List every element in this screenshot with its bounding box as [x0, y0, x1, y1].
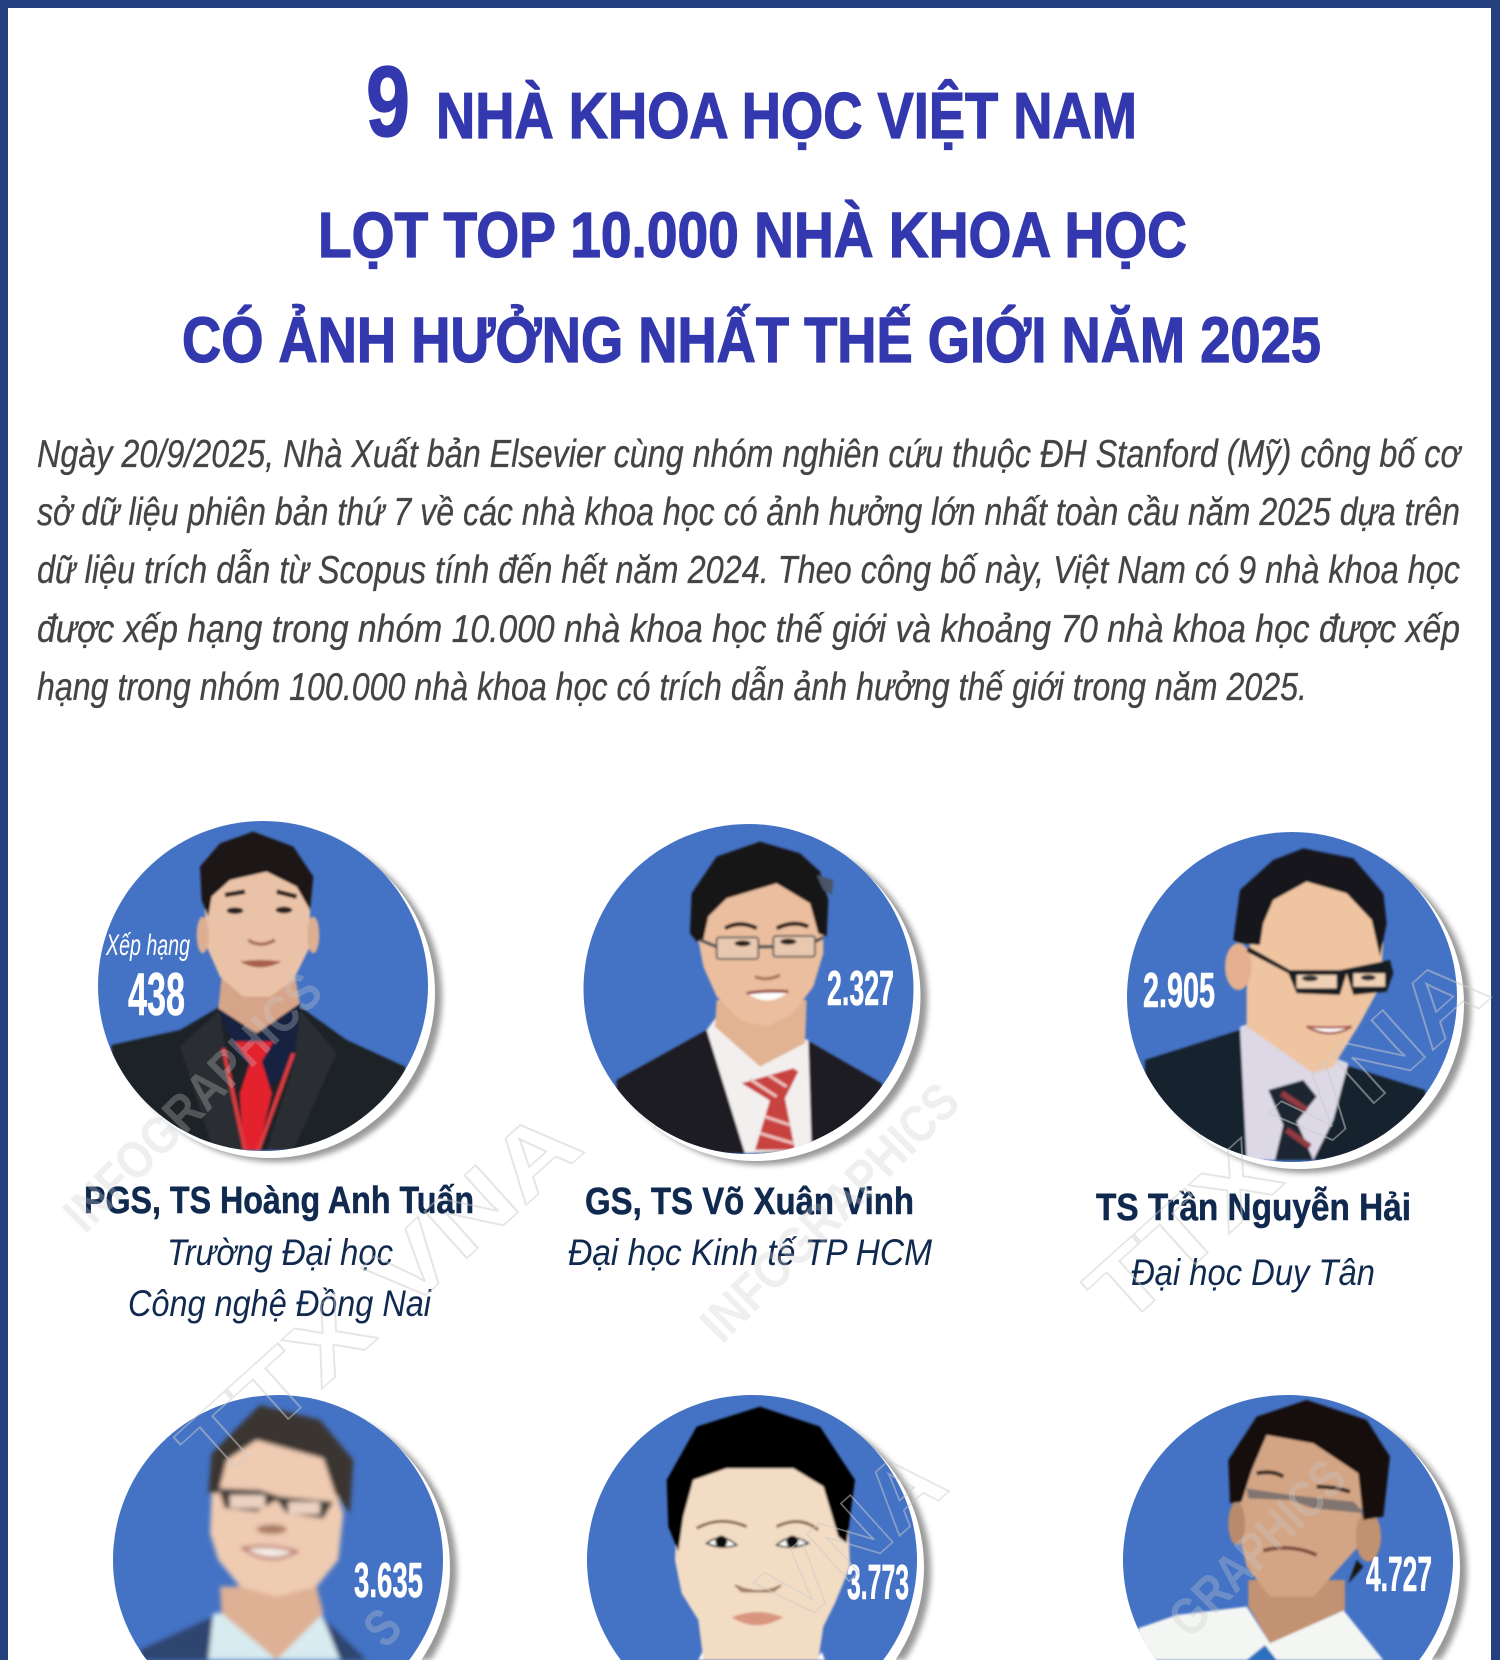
card: Hoàng Anh Tuấn: [84, 821, 474, 1324]
title line 1: 9: [366, 46, 410, 158]
affiliation: Đại học Duy Tân: [1131, 1252, 1375, 1293]
rank 3.635: 3.635: [354, 1554, 423, 1608]
affiliation: Trường Đại học: [167, 1232, 393, 1273]
title line 3: CÓ ẢNH HƯỞNG NHẤT THẾ GIỚI NĂM 2025: [182, 303, 1321, 376]
card: Võ Xuân Vinh: [568, 824, 932, 1273]
name: GS, TS Võ Xuân Vinh: [585, 1181, 914, 1223]
rank 3.773: 3.773: [847, 1556, 909, 1610]
photo: Hoàng Anh Tuấn: [112, 832, 413, 1150]
title line 1: NHÀ KHOA HỌC VIỆT NAM: [436, 79, 1137, 152]
portrait circle 1: [98, 821, 442, 1162]
rank 2.905: 2.905: [1143, 964, 1215, 1018]
card: scientist 4: [113, 1395, 457, 1660]
watermarks: INFOGRAPHICS: [689, 1072, 971, 1353]
intro paragraph: [37, 433, 1463, 709]
portrait circle 4: [113, 1395, 457, 1660]
photo: Trần Nguyễn Hải: [1145, 848, 1433, 1160]
rank 2.327: 2.327: [827, 962, 894, 1016]
title line 2: LỌT TOP 10.000 NHÀ KHOA HỌC: [318, 199, 1187, 271]
portrait circle 6: [1123, 1395, 1467, 1660]
photo: scientist 5: [667, 1407, 855, 1660]
card: Trần Nguyễn Hải: [1096, 832, 1471, 1293]
rank 438: 438: [128, 961, 185, 1028]
portrait circle 2: [584, 824, 928, 1165]
title: [182, 46, 1321, 376]
watermarks: TTX VNA: [160, 1089, 600, 1500]
affiliation: Công nghệ Đồng Nai: [128, 1283, 433, 1324]
photo: scientist 4: [140, 1405, 367, 1660]
watermarks: VNA: [740, 1429, 964, 1645]
photo: scientist 6: [1138, 1400, 1390, 1660]
card: scientist 6: [1123, 1395, 1467, 1660]
label Xếp hạng: Xếp hạng: [105, 929, 190, 962]
watermarks: TTX VNA: [1067, 934, 1500, 1345]
name: TS Trần Nguyễn Hải: [1096, 1185, 1411, 1229]
affiliation: Đại học Kinh tế TP HCM: [568, 1232, 932, 1273]
rank 4.727: 4.727: [1366, 1548, 1432, 1602]
photo: Võ Xuân Vinh: [617, 842, 893, 1153]
portrait circle 5: [587, 1395, 931, 1660]
name: PGS, TS Hoàng Anh Tuấn: [84, 1180, 474, 1222]
watermarks: INFOGRAPHICS: [52, 962, 334, 1243]
card: scientist 5: [587, 1395, 931, 1660]
watermarks: GRAPHICS: [1157, 1448, 1358, 1648]
watermarks: [52, 934, 1500, 1658]
portrait circle 3: [1127, 832, 1471, 1173]
affiliation: [128, 1232, 433, 1324]
title line 1: [366, 46, 1137, 158]
watermarks: S: [352, 1598, 413, 1658]
